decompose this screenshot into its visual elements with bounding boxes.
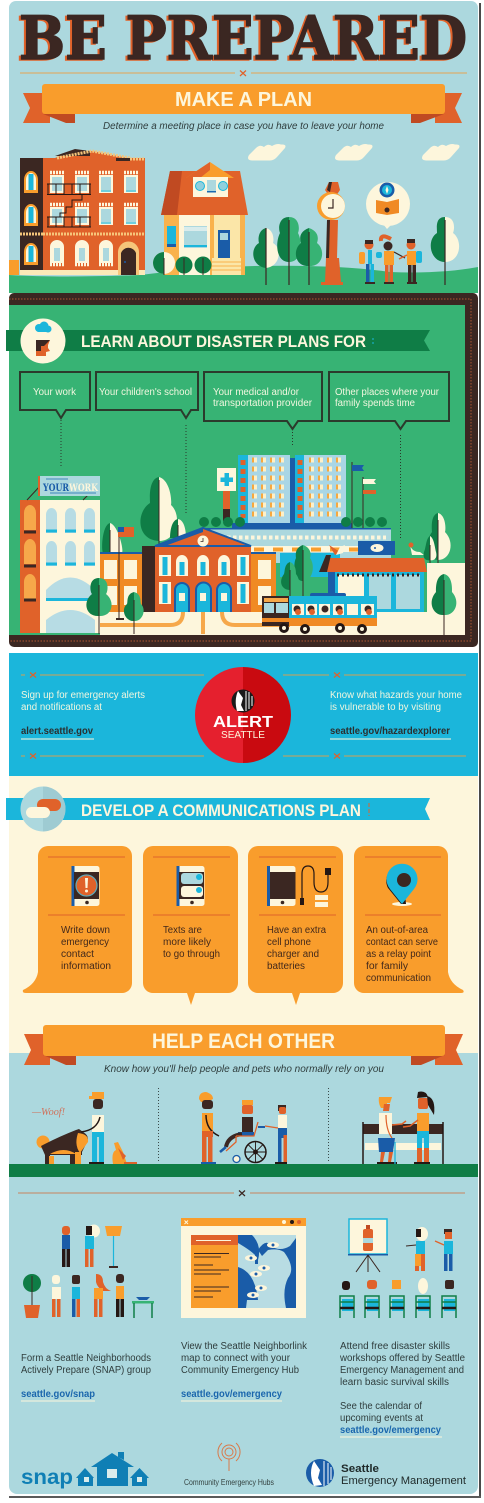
panel: develop a communications plan xyxy=(6,776,478,1056)
card: contact information: contact xyxy=(61,949,94,960)
ribbon: help each other: HELP EACH OTHER xyxy=(152,1030,335,1053)
icon: phone texts xyxy=(176,866,204,906)
callout: your work xyxy=(20,372,90,468)
icon: location pin xyxy=(386,864,418,906)
right text: Know what hazards your home xyxy=(330,690,462,701)
text: workshops: Emergency Management and xyxy=(340,1365,464,1376)
ribbon: communications: DEVELOP A COMMUNICATIONS PLAN xyxy=(81,801,361,820)
cat xyxy=(112,1142,137,1164)
left text: Sign up for emergency alerts xyxy=(21,690,145,701)
text: neighborlink: View the Seattle Neighborlink xyxy=(181,1341,308,1352)
text: workshops: workshops offered by Seattle xyxy=(339,1353,465,1364)
dog xyxy=(36,1129,88,1164)
text: neighborlink xyxy=(181,1341,308,1401)
restaurant xyxy=(319,541,427,612)
card: charger: batteries xyxy=(267,961,305,972)
logo: seattle emergency management: Emergency Management xyxy=(341,1475,466,1487)
illustration: map window xyxy=(181,1218,306,1318)
ribbon: make a plan: MAKE A PLAN xyxy=(175,89,312,111)
column: snap group xyxy=(21,1224,154,1401)
text: snap: Actively Prepare (SNAP) group xyxy=(21,1365,151,1376)
person with leash xyxy=(81,1092,104,1164)
callout: children's school xyxy=(96,372,198,515)
left text xyxy=(21,690,145,739)
panel: help each other xyxy=(9,1025,478,1494)
callout: other places: family spends time xyxy=(335,398,415,409)
bus xyxy=(262,593,377,632)
card: texts xyxy=(143,846,238,1005)
panel: alert seattle xyxy=(9,653,478,776)
callout: other places: Other places where your xyxy=(335,387,440,398)
alert seattle logo: ALERT xyxy=(213,714,274,731)
card: contact information: emergency xyxy=(61,937,109,948)
text: workshops xyxy=(339,1341,465,1437)
callout: your work: Your work xyxy=(33,387,77,398)
right text: is vulnerable to by visiting xyxy=(330,702,441,713)
your work office building: YOUR xyxy=(42,482,69,494)
card: out of area contact: communication xyxy=(366,973,431,984)
card: out of area contact xyxy=(354,846,464,993)
foreground trees xyxy=(86,513,456,635)
text: neighborlink: seattle.gov/emergency xyxy=(181,1389,282,1400)
card: texts: Texts are xyxy=(163,925,202,936)
text: workshops: Attend free disaster skills xyxy=(340,1341,450,1352)
icon: phone alert xyxy=(72,866,100,906)
text: snap: Form a Seattle Neighborhoods xyxy=(21,1353,151,1364)
ground strip xyxy=(9,1164,478,1177)
person in wheelchair xyxy=(220,1100,266,1162)
card: texts: more likely xyxy=(163,937,211,948)
hikers xyxy=(359,236,422,284)
text: neighborlink: map to connect with your xyxy=(181,1353,291,1364)
callout: children's school: Your children's school xyxy=(99,387,192,398)
card: charger xyxy=(248,846,343,1005)
person standing xyxy=(199,1092,219,1164)
text: snap xyxy=(21,1353,151,1401)
card: contact information xyxy=(23,846,132,993)
card: texts: to go through xyxy=(163,949,220,960)
callout: medical provider: transportation provider xyxy=(213,398,313,409)
subtitle: Know how you'll help people and pets who normally rely on you xyxy=(104,1064,384,1075)
woof label: —Woof! xyxy=(31,1106,65,1118)
card: charger: cell phone xyxy=(267,937,311,948)
hospital xyxy=(199,455,391,577)
logo: snap: snap xyxy=(21,1466,73,1489)
house xyxy=(161,162,248,275)
your work office building: WORK xyxy=(68,482,99,494)
card: charger: charger and xyxy=(267,949,319,960)
ribbon: learn about disaster plans xyxy=(6,318,430,364)
text: workshops: learn basic survival skills xyxy=(340,1377,449,1388)
card: contact information: Write down xyxy=(61,925,110,936)
brick apartment building xyxy=(20,149,145,275)
card: out of area contact: contact can serve xyxy=(366,937,438,948)
your work office building xyxy=(20,476,100,633)
logo: seattle emergency management xyxy=(306,1459,466,1487)
callout: medical provider: Your medical and/or xyxy=(213,387,300,398)
school xyxy=(100,527,276,620)
card: charger: Have an extra xyxy=(267,925,326,936)
paths in front of school xyxy=(100,612,290,634)
alert seattle logo xyxy=(195,667,291,763)
ribbon: communications xyxy=(6,786,430,832)
bushes xyxy=(153,252,212,275)
illustration: neighbors xyxy=(23,1224,154,1318)
callout: medical provider xyxy=(204,372,322,446)
ribbon: make a plan xyxy=(23,84,462,123)
text: workshops: upcoming events at xyxy=(340,1413,423,1424)
logo: snap xyxy=(21,1452,149,1489)
column: workshops xyxy=(339,1219,465,1437)
clouds xyxy=(248,144,460,160)
card: contact information: information xyxy=(61,961,111,972)
panel: make a plan xyxy=(9,1,478,293)
text: workshops: seattle.gov/emergency xyxy=(340,1425,441,1436)
text: workshops: See the calendar of xyxy=(340,1401,422,1412)
trees xyxy=(253,217,459,285)
icon: phone and charger xyxy=(267,866,331,907)
left text: and notifications at xyxy=(21,702,102,713)
ribbon: learn about disaster plans: LEARN ABOUT DISASTER PLANS FOR xyxy=(81,332,366,351)
subtitle: Determine a meeting place in case you have to leave your home xyxy=(103,121,384,132)
ribbon: help each other xyxy=(24,1025,463,1065)
logo: community emergency hubs: Community Emergency Hubs xyxy=(184,1478,274,1487)
bench xyxy=(363,1122,443,1164)
left text: alert.seattle.gov xyxy=(21,726,93,737)
column: neighborlink map xyxy=(181,1218,308,1401)
callout: other places xyxy=(329,372,449,538)
right text: seattle.gov/hazardexplorer xyxy=(330,726,450,737)
card: out of area contact: An out-of-area xyxy=(366,925,428,936)
two people at bench xyxy=(377,1092,434,1164)
big tree behind school xyxy=(102,477,186,555)
right text xyxy=(330,690,462,739)
ground xyxy=(9,266,478,293)
card: out of area contact: for family xyxy=(366,961,408,972)
person pushing wheelchair xyxy=(265,1105,287,1164)
alert seattle logo: SEATTLE xyxy=(221,730,265,741)
card: out of area contact: as a relay point xyxy=(366,949,431,960)
speech bubble with map and compass xyxy=(366,182,410,229)
panel: learn about disaster plans xyxy=(6,293,478,647)
logo: seattle emergency management: Seattle xyxy=(341,1463,379,1475)
street clock xyxy=(317,182,345,285)
text: snap: seattle.gov/snap xyxy=(21,1389,95,1400)
illustration: training class xyxy=(340,1219,456,1318)
text: neighborlink: Community Emergency Hub xyxy=(181,1365,299,1376)
logo: community emergency hubs xyxy=(184,1443,274,1487)
